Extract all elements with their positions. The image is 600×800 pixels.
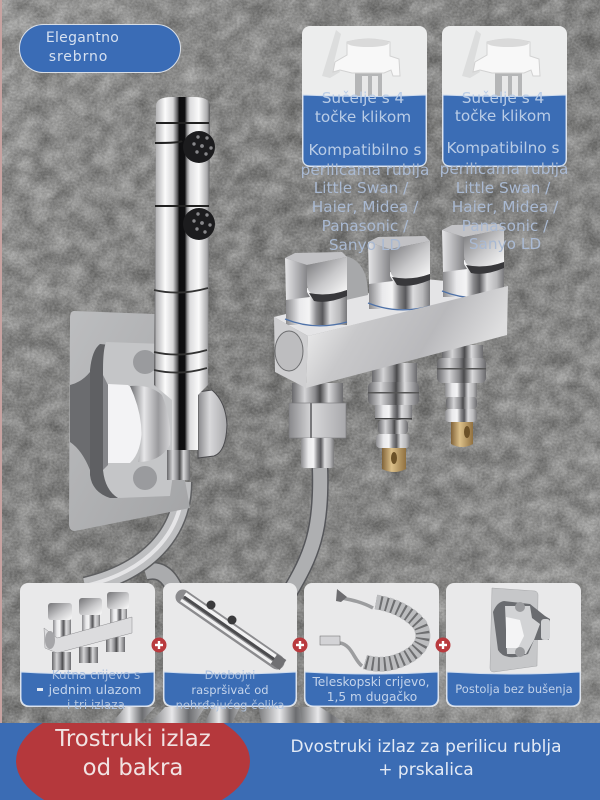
- icon: four point connector: [322, 30, 400, 96]
- icon: sprayer: [181, 594, 283, 665]
- hose fragments under the cards: [112, 707, 345, 723]
- text: compatibility note right: Sanyo LD: [469, 235, 541, 253]
- panel: interface card 1: [302, 26, 427, 167]
- sprayer nozzle buttons: [183, 131, 215, 240]
- subtitle: [290, 737, 562, 780]
- panel: item dual sprayer: [163, 583, 297, 712]
- panel: item dual sprayer: raspršivač od: [191, 683, 269, 697]
- text: compatibility note right: Little Swan /: [456, 179, 551, 197]
- text: compatibility note right: točke klikom: [455, 107, 551, 125]
- hand sprayer body: [154, 97, 215, 480]
- badge: colour name: [20, 24, 180, 72]
- text: compatibility note left: Haier, Midea /: [312, 198, 419, 216]
- panel: item angle valve: Kutna crijevo s: [52, 668, 140, 682]
- text: compatibility note right: Haier, Midea /: [452, 198, 559, 216]
- elbow behind first handle: [346, 256, 368, 300]
- text: compatibility note left: Sučelje s 4: [322, 89, 404, 107]
- triple outlet copper valve: [274, 224, 508, 472]
- text: compatibility note left: točke klikom: [315, 108, 411, 126]
- manifold top surface: [274, 279, 508, 336]
- panel: item telescopic hose: Teleskopski crijevo,: [311, 675, 430, 689]
- icon: coiled hose: [320, 589, 423, 666]
- text: compatibility note right: [440, 89, 568, 253]
- text: compatibility note left: Little Swan /: [314, 179, 409, 197]
- text: compatibility note right: perilicama rublja: [440, 160, 568, 178]
- red title ellipse: Trostruki izlaz: [54, 726, 211, 752]
- lower outlets: [289, 345, 486, 472]
- icon: wall bracket: [490, 588, 550, 672]
- panel: item dual sprayer: nehrđajućeg čelika: [176, 698, 284, 712]
- icon: plus 3: [436, 638, 450, 652]
- adhesive wall plate with bracket: [69, 311, 227, 531]
- panel: item telescopic hose: 1,5 m dugačko: [327, 690, 417, 704]
- icon: triple valve: [44, 592, 132, 670]
- panel: item telescopic hose: [304, 583, 439, 707]
- text: compatibility note left: Sanyo LD: [329, 236, 401, 254]
- panel: interface card 2: [442, 26, 567, 167]
- text: compatibility note left: Kompatibilno s: [309, 141, 422, 159]
- hoses behind the cards: [85, 468, 320, 595]
- panel: item angle valve: jednim ulazom: [48, 682, 141, 697]
- manifold block: [274, 286, 508, 388]
- text: compatibility note left: [301, 89, 429, 254]
- icon: four point connector: [462, 30, 540, 96]
- text: compatibility note right: Sučelje s 4: [462, 89, 544, 107]
- panel: item no-drill bracket: [446, 583, 581, 707]
- panel: item dual sprayer: Dvobojni: [205, 668, 255, 682]
- panel: item angle valve: i tri izlaza: [67, 698, 125, 712]
- red title ellipse: od bakra: [83, 755, 183, 781]
- text: compatibility note left: Panasonic /: [322, 217, 409, 235]
- panel: item angle valve: [20, 583, 155, 712]
- footer band: [0, 723, 600, 800]
- red title ellipse: [16, 723, 250, 800]
- text: compatibility note right: Kompatibilno s: [447, 139, 560, 157]
- icon: plus 1: [152, 638, 166, 652]
- valve handles: [285, 224, 504, 326]
- badge: colour name: Elegantno: [46, 30, 119, 46]
- text: compatibility note right: Panasonic /: [462, 217, 549, 235]
- text: compatibility note left: perilicama rublja: [301, 161, 429, 179]
- icon: plus 2: [292, 638, 308, 652]
- badge: colour name: srebrno: [49, 49, 108, 65]
- subtitle: Dvostruki izlaz za perilicu rublja: [290, 737, 562, 757]
- panel: item no-drill bracket: Postolja bez bušenja: [455, 682, 573, 696]
- subtitle: + prskalica: [378, 760, 474, 780]
